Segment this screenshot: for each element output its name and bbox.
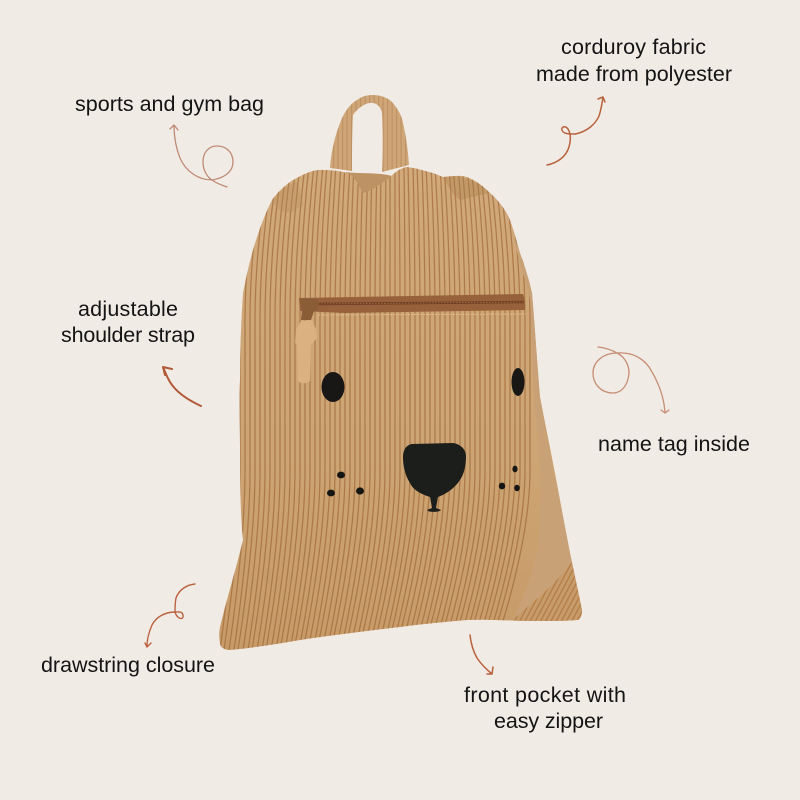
gathered fabric behind the drawstring xyxy=(346,172,392,198)
label: sports and gym bag: sports and gym bag xyxy=(75,92,264,116)
bag illustration xyxy=(210,95,590,650)
left whisker dots xyxy=(327,472,364,496)
arrow: sports and gym bag xyxy=(170,125,233,187)
right whisker dots xyxy=(499,466,520,491)
label: adjustable shoulder strap: adjustable xyxy=(78,297,178,321)
label: adjustable shoulder strap xyxy=(61,297,195,347)
arrow: corduroy fabric xyxy=(547,97,605,165)
bag fabric ribs and shading xyxy=(210,165,590,650)
left eye xyxy=(322,372,344,402)
plain side band xyxy=(514,237,582,621)
label: corduroy fabric made from polyester xyxy=(536,35,732,86)
nose xyxy=(403,443,466,512)
zipper slider xyxy=(300,299,318,320)
arrow: adjustable shoulder strap xyxy=(163,367,201,406)
arrow: front pocket xyxy=(470,635,493,674)
right eye xyxy=(512,368,524,396)
label: corduroy fabric made from polyester: corduroy fabric xyxy=(561,35,706,59)
label: drawstring closure: drawstring closure xyxy=(41,653,215,677)
bag body xyxy=(219,167,582,650)
front zipper xyxy=(295,294,526,383)
label: front pocket with easy zipper xyxy=(464,683,626,733)
bottom corner ribs xyxy=(513,562,582,621)
label: corduroy fabric made from polyester: made from polyester xyxy=(536,62,732,86)
zipper pull tab xyxy=(295,320,317,383)
label: front pocket with easy zipper: front pocket with xyxy=(464,683,626,707)
arrow: name tag inside xyxy=(593,347,669,413)
label: adjustable shoulder strap: shoulder strap xyxy=(61,323,195,347)
label: name tag inside: name tag inside xyxy=(598,432,750,456)
bag handle xyxy=(330,95,409,172)
arrow: drawstring closure xyxy=(145,584,195,647)
label: front pocket with easy zipper: easy zipper xyxy=(494,709,603,733)
